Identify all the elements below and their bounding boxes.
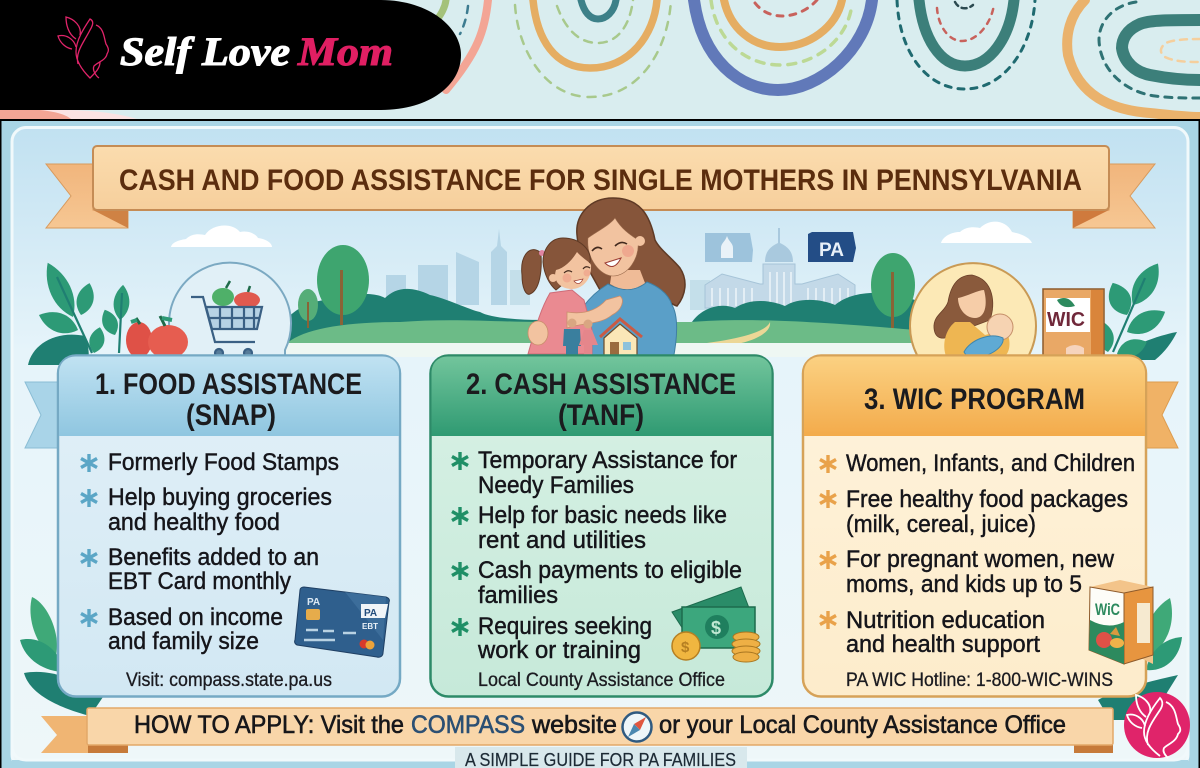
visit link: Visit: compass.state.pa.us [126,670,332,691]
icon: cart apples [212,281,260,308]
heading: TANF [466,368,736,432]
office note: Local County Assistance Office [478,670,725,691]
icon: EBT card: EBT [362,622,378,631]
child figure [522,238,622,354]
bottom leaves left [20,597,103,716]
bullet text: TANF: Temporary Assistance for [478,447,737,474]
bullet text: TANF: Needy Families [478,472,634,499]
ribbon left of panel one [25,382,60,448]
bullet stars [820,455,836,629]
logo bar [0,0,461,110]
bullet text: SNAP: Help buying groceries [108,484,332,511]
icon: cash and coins [672,587,760,662]
panel: WIC program [803,356,1153,696]
heading: SNAP: (SNAP) [186,399,276,432]
icon: mother and baby in circle [910,263,1036,358]
heading: TANF: 2. CASH ASSISTANCE [466,368,736,401]
illustration: mother and child [522,198,685,360]
icon: cash and coins: $ [681,639,690,656]
heading: WIC: 3. WIC PROGRAM [864,383,1085,416]
compass word: COMPASS [411,711,525,739]
capitol and PA state icons [705,228,856,308]
bullet text: WIC: moms, and kids up to 5 [846,571,1082,598]
icon: compass [622,712,652,742]
leaves left [28,258,131,365]
panel: cash assistance TANF [430,356,772,696]
icon: WIC box at top [1043,289,1104,357]
icon: cart body [191,297,262,357]
hotline: PA WIC Hotline: 1-800-WIC-WINS [846,670,1113,691]
icon: WIC food box [1089,580,1153,664]
heading: SNAP [95,368,362,432]
icon: EBT card: PA [364,608,377,619]
bullet text: WIC: Nutrition education [846,607,1045,634]
family figures [563,318,598,360]
bullet text: SNAP: Based on income [108,604,283,631]
icon: EBT card [295,587,389,657]
bullet text: TANF: Help for basic needs like [478,502,727,529]
bullet text: WIC: Free healthy food packages [846,486,1128,513]
bullet text: TANF: Requires seeking [478,613,652,640]
top header background [0,0,1200,120]
bullet text: TANF [477,447,742,664]
city skyline [386,229,710,310]
title: CASH AND FOOD ASSISTANCE FOR SINGLE MOTHERS IN PENNSYLVANIA [119,164,1082,197]
clouds [171,222,1032,247]
bullet text: SNAP: and healthy food [108,509,280,536]
bullet text: SNAP: EBT Card monthly [108,568,291,595]
logo icon: woman and leaves [58,17,108,78]
banner: how to apply [41,708,1113,753]
bullet text: SNAP [108,449,339,655]
brand name: Self Love [120,29,290,74]
decorative looping lines [437,0,1200,117]
bullet stars [452,452,468,636]
bullet text: TANF: Cash payments to eligible [478,557,742,584]
bullet text: SNAP: and family size [108,628,259,655]
bullet text: WIC: Women, Infants, and Children [846,450,1135,477]
logo badge [1124,692,1190,758]
bullet text: WIC: (milk, cereal, juice) [846,511,1036,538]
icon: WIC food box: WiC [1095,600,1120,619]
house icon [600,319,642,359]
icon: shopping cart in circle [169,263,291,358]
bullet text: TANF: families [478,582,558,609]
heading: TANF: (TANF) [558,399,644,432]
bullet stars [81,454,97,627]
panel: food assistance SNAP [58,356,400,696]
bullet text: TANF: rent and utilities [478,527,646,554]
icon: red apples [126,316,188,359]
bullet text: WIC: For pregnant women, new [846,546,1115,573]
ribbon right of panel three [1143,382,1178,448]
heading ribbon [46,146,1155,228]
icon: WIC box at top: WIC [1047,309,1085,331]
brand name accent: Mom [297,29,393,74]
website word: website [531,711,617,739]
park landscape [285,245,915,357]
bullet text: WIC [846,450,1135,658]
leaves right [1095,258,1177,362]
apply text end: or your Local County Assistance Office [659,711,1066,739]
bullet text: SNAP: Benefits added to an [108,544,319,571]
heading: SNAP: 1. FOOD ASSISTANCE [95,368,362,401]
icon: EBT card: PA [307,597,320,608]
icon: cash and coins: $ [711,618,721,638]
bullet text: TANF: work or training [477,637,641,664]
capitol and PA state icons: PA [819,240,844,261]
bullet text: SNAP: Formerly Food Stamps [108,449,339,476]
apply text start: HOW TO APPLY: Visit the [134,711,404,739]
bottom leaves right [1098,598,1182,720]
bullet text: WIC: and health support [846,631,1040,658]
